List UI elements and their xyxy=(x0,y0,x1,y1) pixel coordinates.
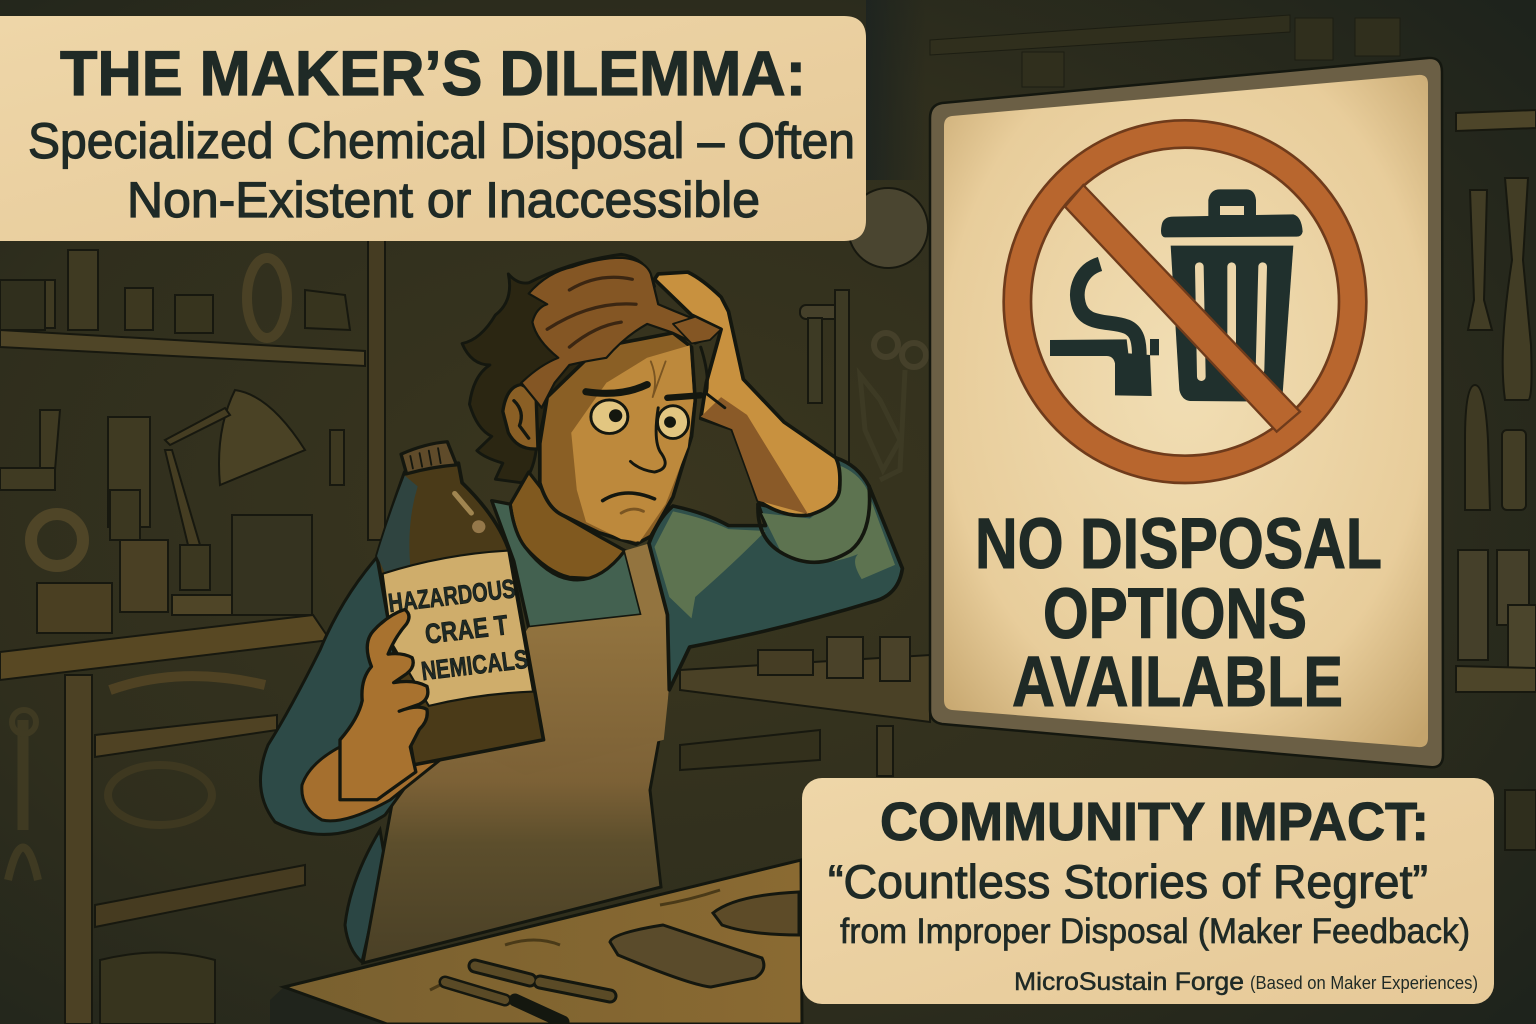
label text: CRAE T xyxy=(423,610,510,651)
sign text: NO DISPOSAL xyxy=(975,505,1382,584)
brows xyxy=(586,385,647,393)
title panel: Non-Existent or Inaccessible xyxy=(127,172,760,228)
bottle xyxy=(377,463,544,765)
panel heading: COMMUNITY IMPACT: xyxy=(880,792,1429,852)
community impact panel xyxy=(802,778,1494,1004)
warning sign: OPTIONS xyxy=(1043,575,1307,654)
smoke pipe xyxy=(1077,264,1139,357)
dark back hair xyxy=(462,254,654,483)
apron bib xyxy=(451,543,669,776)
collar xyxy=(492,501,642,627)
person xyxy=(260,254,902,963)
community impact panel: (Based on Maker Experiences) xyxy=(1250,973,1478,993)
mouth xyxy=(603,493,654,501)
eyes xyxy=(591,400,628,433)
trash can xyxy=(1161,189,1303,237)
apron lower body xyxy=(363,650,668,963)
tool: flat block on bench xyxy=(610,925,764,987)
fingers and palm xyxy=(340,609,428,800)
panel quote: “Countless Stories of Regret” xyxy=(828,855,1428,908)
raised sleeve xyxy=(649,458,902,690)
warning sign xyxy=(930,58,1443,767)
top wall planks xyxy=(930,15,1400,87)
source credit: MicroSustain Forge xyxy=(1014,968,1244,996)
label text: HAZARDOUS xyxy=(387,574,517,618)
left shelving xyxy=(0,240,385,1024)
shade right of title xyxy=(866,0,926,180)
left sleeve xyxy=(260,545,425,834)
bottle label xyxy=(383,551,533,706)
face xyxy=(540,333,695,544)
right wall tools xyxy=(1456,110,1536,850)
label text: NEMICALS xyxy=(419,644,530,686)
title line: THE MAKER’S DILEMMA: xyxy=(60,39,806,109)
prohibition ring xyxy=(1017,134,1353,469)
rag on bench xyxy=(713,892,799,935)
apron tail xyxy=(345,830,385,962)
upper figure traced xyxy=(340,254,902,800)
workbench xyxy=(270,860,802,1024)
forearm on bottle side xyxy=(302,722,440,821)
bottle cap xyxy=(401,442,457,474)
label text xyxy=(387,573,530,689)
centre wall tools and clock xyxy=(680,188,930,776)
icon: no trash symbol xyxy=(1017,134,1353,469)
front hair xyxy=(521,258,721,408)
warning sign: AVAILABLE xyxy=(1012,643,1343,722)
nose xyxy=(630,408,665,472)
forearm and hand on head xyxy=(654,272,840,515)
panel detail: from Improper Disposal (Maker Feedback) xyxy=(840,912,1470,951)
tool: pliers on bench xyxy=(445,966,610,1022)
title panel xyxy=(0,16,866,241)
subtitle lines: Specialized Chemical Disposal – Often xyxy=(28,113,855,169)
face lit area xyxy=(571,345,693,542)
ear xyxy=(503,385,538,449)
neck xyxy=(510,472,625,579)
